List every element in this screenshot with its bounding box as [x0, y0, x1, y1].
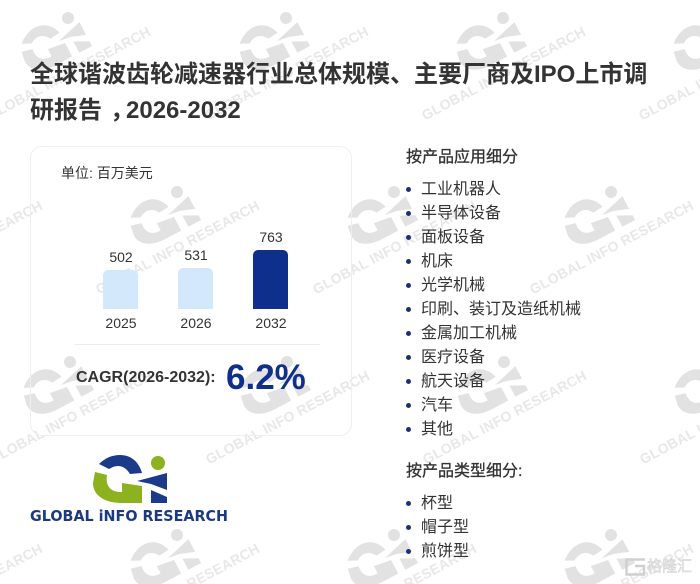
brand text: 格隆汇: [647, 558, 692, 575]
item: 光学机械: [421, 277, 485, 294]
item: 半导体设备: [421, 205, 501, 222]
background watermarks: GLOBAL INFO RESEARCH: [202, 23, 371, 123]
item: [406, 252, 453, 270]
item: 帽子型: [421, 519, 469, 536]
icon: Gi mark: [93, 455, 167, 503]
list: applications: [406, 180, 581, 438]
logo wordmark: GLOBAL iNFO RESEARCH: [30, 507, 228, 525]
item: [406, 396, 453, 414]
icon: G box: [625, 558, 646, 576]
background watermarks: GLOBAL INFO RESEARCH: [203, 367, 372, 467]
item: 其他: [421, 421, 453, 438]
item: 煎饼型: [421, 543, 469, 560]
item: 工业机器人: [421, 181, 501, 198]
bar 2032: [253, 250, 288, 309]
CAGR label: CAGR(2026-2032):: [76, 369, 216, 386]
background watermarks: GLOBAL INFO RESEARCH: [93, 197, 262, 297]
bar 2025: [103, 270, 138, 309]
item: 医疗设备: [421, 349, 485, 366]
background watermarks: GLOBAL INFO RESEARCH: [527, 197, 696, 297]
background watermarks: GLOBAL INFO RESEARCH: [310, 197, 479, 297]
item: [406, 420, 453, 438]
year 2026: 2026: [180, 315, 212, 331]
logo: Global Info Research: [30, 455, 228, 525]
item: [406, 494, 453, 512]
bar chart: [103, 229, 288, 331]
background watermarks: GLOBAL INFO RESEARCH: [420, 367, 589, 467]
list: product types: [406, 494, 469, 560]
item: 金属加工机械: [421, 325, 517, 342]
year 2025: 2025: [105, 315, 137, 331]
bar 2026: [178, 268, 213, 309]
title: 全球谐波齿轮减速器行业总体规模、主要厂商及IPO上市调研报告 ，2026-2032: [30, 61, 647, 124]
panel: market size chart card: [30, 146, 352, 436]
unit label: 单位: 百万美元: [61, 165, 153, 181]
heading: by product type: 按产品类型细分:: [406, 463, 522, 480]
item: 印刷、装订及造纸机械: [421, 301, 581, 318]
value 2026: 531: [184, 247, 208, 263]
item: 杯型: [421, 495, 453, 512]
value 2032: 763: [259, 229, 283, 245]
year 2032: 2032: [255, 315, 287, 331]
heading: by application: 按产品应用细分: [406, 149, 518, 166]
value 2025: 502: [109, 249, 133, 265]
background watermarks: GLOBAL INFO RESEARCH: [419, 23, 588, 123]
item: 汽车: [421, 397, 453, 414]
CAGR value: 6.2%: [226, 358, 306, 397]
item: 面板设备: [421, 229, 485, 246]
source watermark: Gelonghui: [625, 558, 692, 576]
item: 机床: [421, 253, 453, 270]
item: 航天设备: [421, 373, 485, 390]
